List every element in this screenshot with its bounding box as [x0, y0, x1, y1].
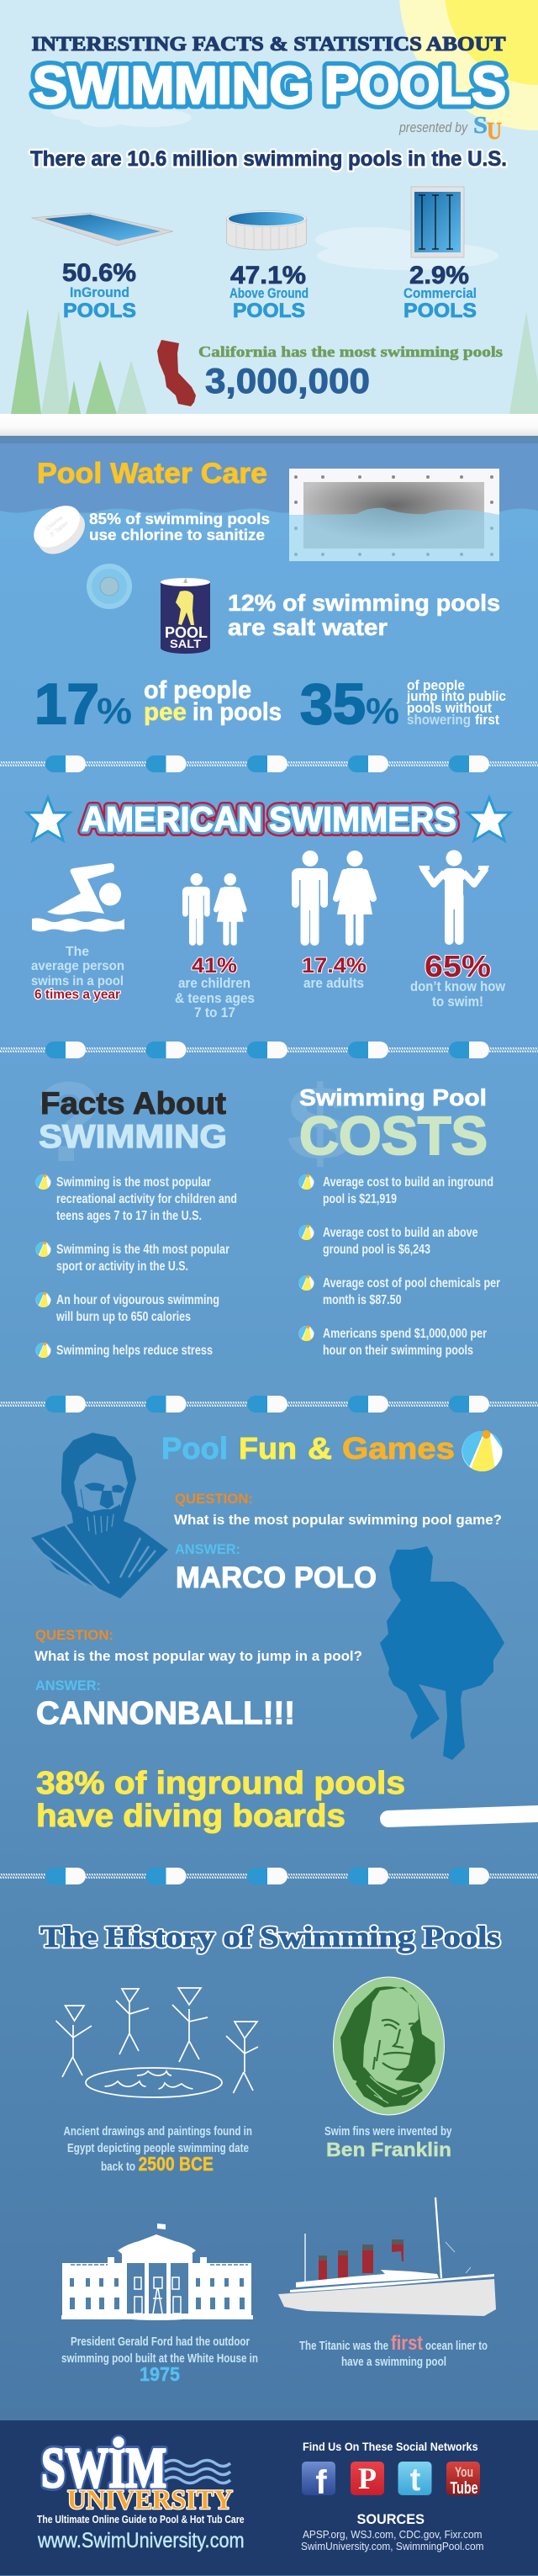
text: titanic first: have a swimming pool — [341, 2355, 446, 2369]
panel: footer — [0, 2420, 538, 2576]
heading: facts about swimming: SWIMMING — [39, 1119, 227, 1155]
panel: pool deck edge — [0, 414, 538, 443]
list: costs: pool is $21,919 — [323, 1192, 397, 1206]
icon: twitter — [398, 2462, 432, 2498]
text: question 1: What is the most popular swimming pool game? — [174, 1512, 502, 1528]
icon: pool window — [289, 469, 499, 561]
logo: swim university: SWIM — [41, 2436, 166, 2499]
stat: above ground: 47.1% — [230, 262, 306, 289]
heading: american swimmers: SWIMMERS — [269, 799, 456, 839]
trees — [11, 309, 538, 414]
stat: 17 percent pee — [34, 672, 282, 736]
icon: beach ball — [462, 1430, 503, 1471]
text: salt water stat: 12% of swimming pools — [228, 590, 500, 616]
text: 2500 BCE: Ancient drawings and paintings found in — [64, 2124, 252, 2139]
heading: swimming pool costs: COSTS — [299, 1105, 488, 1166]
stat: california — [198, 343, 503, 400]
text: question 1 — [174, 1491, 502, 1594]
coat — [356, 2067, 423, 2107]
logo: swim university: The Ultimate Online Guide to Pool & Hot Tub Care — [37, 2514, 245, 2526]
stat: california: California has the most swimming pools — [198, 343, 503, 360]
text: 1975 — [61, 2335, 258, 2385]
icon: swimmer — [32, 863, 124, 932]
hair right and shadow — [395, 2002, 435, 2083]
list: swimming facts: teens ages 7 to 17 in the U.S. — [56, 1209, 202, 1223]
heading: pool water care: Pool Water Care — [37, 458, 267, 490]
icon: children — [182, 873, 244, 946]
list: swimming facts: An hour of vigourous swimming — [56, 1293, 219, 1307]
heading: history of swimming pools: The History of Swimming Pools — [40, 1921, 500, 1953]
text: question 1: MARCO POLO — [176, 1561, 377, 1594]
list: costs: hour on their swimming pools — [323, 1344, 473, 1358]
stat: children — [175, 954, 255, 1020]
icon: sun — [399, 0, 538, 130]
heading: american swimmers: SWIMMERS — [269, 799, 456, 839]
heading: history of swimming pools: The History of Swimming Pools — [40, 1921, 500, 1953]
stat: commercial: POOLS — [404, 299, 477, 322]
text: 1975: swimming pool built at the White House in — [61, 2351, 258, 2366]
icon: pool salt can: SALT — [170, 637, 201, 650]
text: average person: average person — [31, 959, 124, 973]
list: swimming facts: Swimming helps reduce stress — [56, 1344, 213, 1358]
text: sources: SwimUniversity.com, SwimmingPool.com — [301, 2540, 484, 2552]
icon: chlorine tablet: Chlorine — [45, 515, 65, 533]
stat: children: & teens ages — [175, 991, 255, 1006]
icon: youtube: Tube — [451, 2479, 477, 2498]
stat: can't swim: to swim! — [432, 994, 483, 1010]
heading: social networks: Find Us On These Social Networks — [303, 2440, 478, 2453]
logo: swim university: UNIVERSITY — [67, 2485, 233, 2515]
icon: above ground pool — [227, 210, 307, 250]
text: ben franklin — [324, 2124, 452, 2160]
heading: pool fun and games: Games — [342, 1431, 455, 1466]
headline: 10.6 million: There are 10.6 million swimming pools in the U.S. — [30, 147, 507, 171]
heading: swimming pool costs: Swimming Pool — [299, 1084, 487, 1110]
list: swimming facts: sport or activity in the U.S. — [56, 1259, 188, 1274]
text: 2500 BCE: Egypt depicting people swimming date — [67, 2141, 249, 2155]
stat: can't swim: 65% — [425, 949, 491, 983]
presented by logo: S — [473, 113, 488, 139]
stat: adults — [302, 954, 367, 991]
text: question 2 — [34, 1627, 362, 1731]
icon: twitter: t — [410, 2462, 421, 2498]
text: average person: The — [66, 945, 89, 959]
text: ben franklin: Swim fins were invented by — [324, 2124, 452, 2139]
stat: 17 percent pee: in pools — [193, 698, 282, 726]
stat: inground: 50.6% — [62, 259, 136, 287]
text: question 1: ANSWER: — [175, 1541, 240, 1557]
text: 2500 BCE: back to — [101, 2160, 135, 2174]
icon: commercial pool — [411, 187, 464, 257]
icon: pool salt can — [161, 577, 210, 654]
stat: can't swim — [410, 949, 505, 1010]
stat: children: 41% — [192, 954, 237, 978]
stat: children: 7 to 17 — [194, 1005, 235, 1020]
stat: 35 percent no shower: pools without — [407, 700, 492, 716]
stat: inground: InGround — [70, 284, 129, 300]
icon: facebook: f — [315, 2464, 327, 2501]
text: chlorine stat: 85% of swimming pools — [89, 511, 270, 527]
heading: pool fun and games: & — [308, 1431, 332, 1466]
text: sources — [301, 2511, 484, 2552]
face — [74, 1453, 128, 1513]
heading: american swimmers: AMERICAN — [82, 799, 262, 839]
stat: 17 percent pee: 17 — [34, 672, 99, 736]
text: chlorine stat — [89, 511, 270, 543]
logo: swim university: SWIM — [41, 2436, 166, 2499]
stat: inground — [62, 259, 136, 322]
stat: commercial: Commercial — [404, 285, 477, 301]
list: swimming facts: will burn up to 650 calories — [55, 1310, 191, 1324]
icon: chlorine tablet — [26, 497, 92, 563]
text: question 2: ANSWER: — [35, 1678, 101, 1693]
stat: 17 percent pee: % — [97, 691, 132, 732]
panel: sky header — [0, 0, 538, 414]
stat: children: are children — [178, 976, 251, 991]
text: average person — [31, 945, 124, 1002]
stat: 17 percent pee: pee — [144, 698, 187, 726]
text: titanic first: first — [391, 2332, 423, 2355]
text: titanic first: The Titanic was the — [299, 2339, 388, 2353]
list: swimming facts: recreational activity for children and — [56, 1192, 237, 1206]
stat: can't swim: don’t know how — [410, 979, 505, 994]
lane rope 2 — [0, 1042, 538, 1058]
text: question 2: CANNONBALL!!! — [36, 1696, 295, 1731]
heading: american swimmers: SWIMMERS — [269, 799, 456, 839]
icon: shrugging person — [419, 850, 489, 945]
icon: california — [157, 340, 196, 406]
text: 1975: 1975 — [140, 2363, 180, 2385]
logo: swim university: www.SwimUniversity.com — [37, 2529, 245, 2552]
list: costs: ground pool is $6,243 — [323, 1243, 430, 1257]
text: diving boards stat: have diving boards — [36, 1799, 345, 1834]
stat: 17 percent pee: of people — [144, 676, 251, 704]
stat: 35 percent no shower: % — [366, 691, 399, 732]
stat: above ground: Above Ground — [229, 285, 309, 301]
list: swimming facts: Swimming is the 4th most popular — [56, 1243, 229, 1257]
stat: 35 percent no shower: showering — [407, 712, 471, 728]
heading: pool fun and games — [161, 1431, 455, 1466]
stat: california: 3,000,000 — [205, 361, 370, 400]
stat: 35 percent no shower: first — [475, 712, 499, 728]
icon: titanic — [278, 2197, 496, 2316]
list: swimming facts: Swimming is the most popular — [56, 1175, 211, 1190]
heading: facts about swimming: Facts About — [40, 1086, 226, 1121]
stat: commercial: 2.9% — [409, 262, 469, 289]
icon: youtube: You — [455, 2464, 473, 2480]
text: chlorine stat: use chlorine to sanitize — [89, 527, 265, 543]
text: sources: APSP.org, WSJ.com, CDC.gov, Fixr.com — [303, 2528, 483, 2541]
heading: american swimmers: AMERICAN — [82, 799, 262, 839]
logo: swim university — [37, 2436, 245, 2552]
panel: facts about swimming — [34, 1058, 237, 1358]
icon: pinterest: P — [358, 2462, 377, 2495]
icon: facebook — [302, 2462, 335, 2501]
heading: pool fun and games: Fun — [239, 1431, 297, 1466]
heading: american swimmers: AMERICAN — [82, 799, 262, 839]
list: costs: Americans spend $1,000,000 per — [323, 1327, 487, 1341]
stat: above ground: POOLS — [233, 299, 305, 322]
lane rope 1 — [0, 755, 538, 772]
list: costs: Average cost to build an above — [323, 1226, 478, 1240]
icon: chlorine tablet: 3" Tablet — [49, 521, 69, 538]
stat: 35 percent no shower — [300, 672, 506, 736]
text: 2500 BCE: 2500 BCE — [138, 2153, 214, 2175]
lane rope 4 — [0, 1868, 538, 1884]
icon: white house — [61, 2224, 253, 2320]
text: sources: SOURCES — [356, 2511, 425, 2527]
text: salt water stat: are salt water — [228, 614, 388, 640]
hair left — [340, 1986, 418, 2085]
stat: 35 percent no shower: 35 — [300, 672, 366, 736]
icon: diving board — [380, 1805, 538, 1827]
text: titanic first: ocean liner to — [425, 2339, 488, 2353]
text: 1975: President Gerald Ford had the outdoor — [71, 2335, 250, 2349]
icon: adults — [292, 851, 373, 946]
panel: swimming pool costs — [287, 1065, 500, 1358]
heading: american swimmers — [27, 798, 510, 840]
panel: swimming pool costs: $ — [287, 1065, 353, 1182]
heading: pool fun and games: Pool — [161, 1431, 228, 1466]
text: question 1: QUESTION: — [175, 1491, 253, 1507]
clouds — [51, 103, 498, 270]
text: titanic first — [299, 2332, 488, 2369]
headline: 10.6 million: There are 10.6 million swimming pools in the U.S. — [30, 147, 507, 171]
list: costs: month is $87.50 — [323, 1293, 402, 1307]
text: 2500 BCE — [64, 2124, 252, 2175]
title: swimming pools: SWIMMING POOLS — [33, 56, 506, 115]
stat: 35 percent no shower: of people — [407, 677, 465, 693]
icon: pinterest — [351, 2462, 384, 2495]
text: diving boards stat: 38% of inground pools — [36, 1766, 405, 1801]
icon: cannonball silhouette — [380, 1546, 504, 1760]
icon: inground pool — [32, 213, 173, 246]
icon: marco polo bust — [31, 1433, 168, 1598]
text: salt water stat — [228, 590, 500, 640]
text: question 2: What is the most popular way to jump in a pool? — [34, 1648, 362, 1664]
stat: 35 percent no shower: jump into public — [406, 688, 506, 704]
presented by logo: U — [487, 119, 502, 145]
icon: youtube — [446, 2462, 480, 2498]
heading: facts about swimming — [39, 1086, 227, 1155]
text: ben franklin: Ben Franklin — [326, 2139, 451, 2160]
icon: pool light — [87, 564, 132, 609]
heading: interesting facts: INTERESTING FACTS & STATISTICS ABOUT — [32, 34, 506, 56]
icon: pool salt can: POOL — [165, 624, 208, 641]
list: costs: Average cost to build an inground — [323, 1175, 493, 1190]
stat: adults: are adults — [303, 976, 364, 991]
text: average person: 6 times a year — [34, 988, 120, 1002]
icon: ben franklin portrait — [333, 1977, 444, 2115]
icon: egyptian stick figures — [55, 1988, 258, 2097]
stat: inground: POOLS — [63, 299, 136, 322]
stat: above ground — [229, 262, 309, 322]
text: diving boards stat — [36, 1766, 405, 1834]
title: swimming pools: SWIMMING POOLS — [33, 56, 506, 115]
stat: adults: 17.4% — [302, 954, 367, 978]
face features — [373, 2020, 419, 2070]
list: costs — [299, 1174, 500, 1358]
presented by logo — [398, 113, 502, 145]
panel: water background — [0, 443, 538, 2420]
presented by logo: presented by — [398, 120, 468, 135]
lane rope 3 — [0, 1396, 538, 1413]
text: question 2: QUESTION: — [35, 1627, 113, 1643]
text: average person: swims in a pool — [31, 974, 124, 989]
panel: facts about swimming: ? — [34, 1058, 103, 1185]
list: swimming facts — [35, 1174, 237, 1358]
stat: commercial — [404, 262, 477, 322]
